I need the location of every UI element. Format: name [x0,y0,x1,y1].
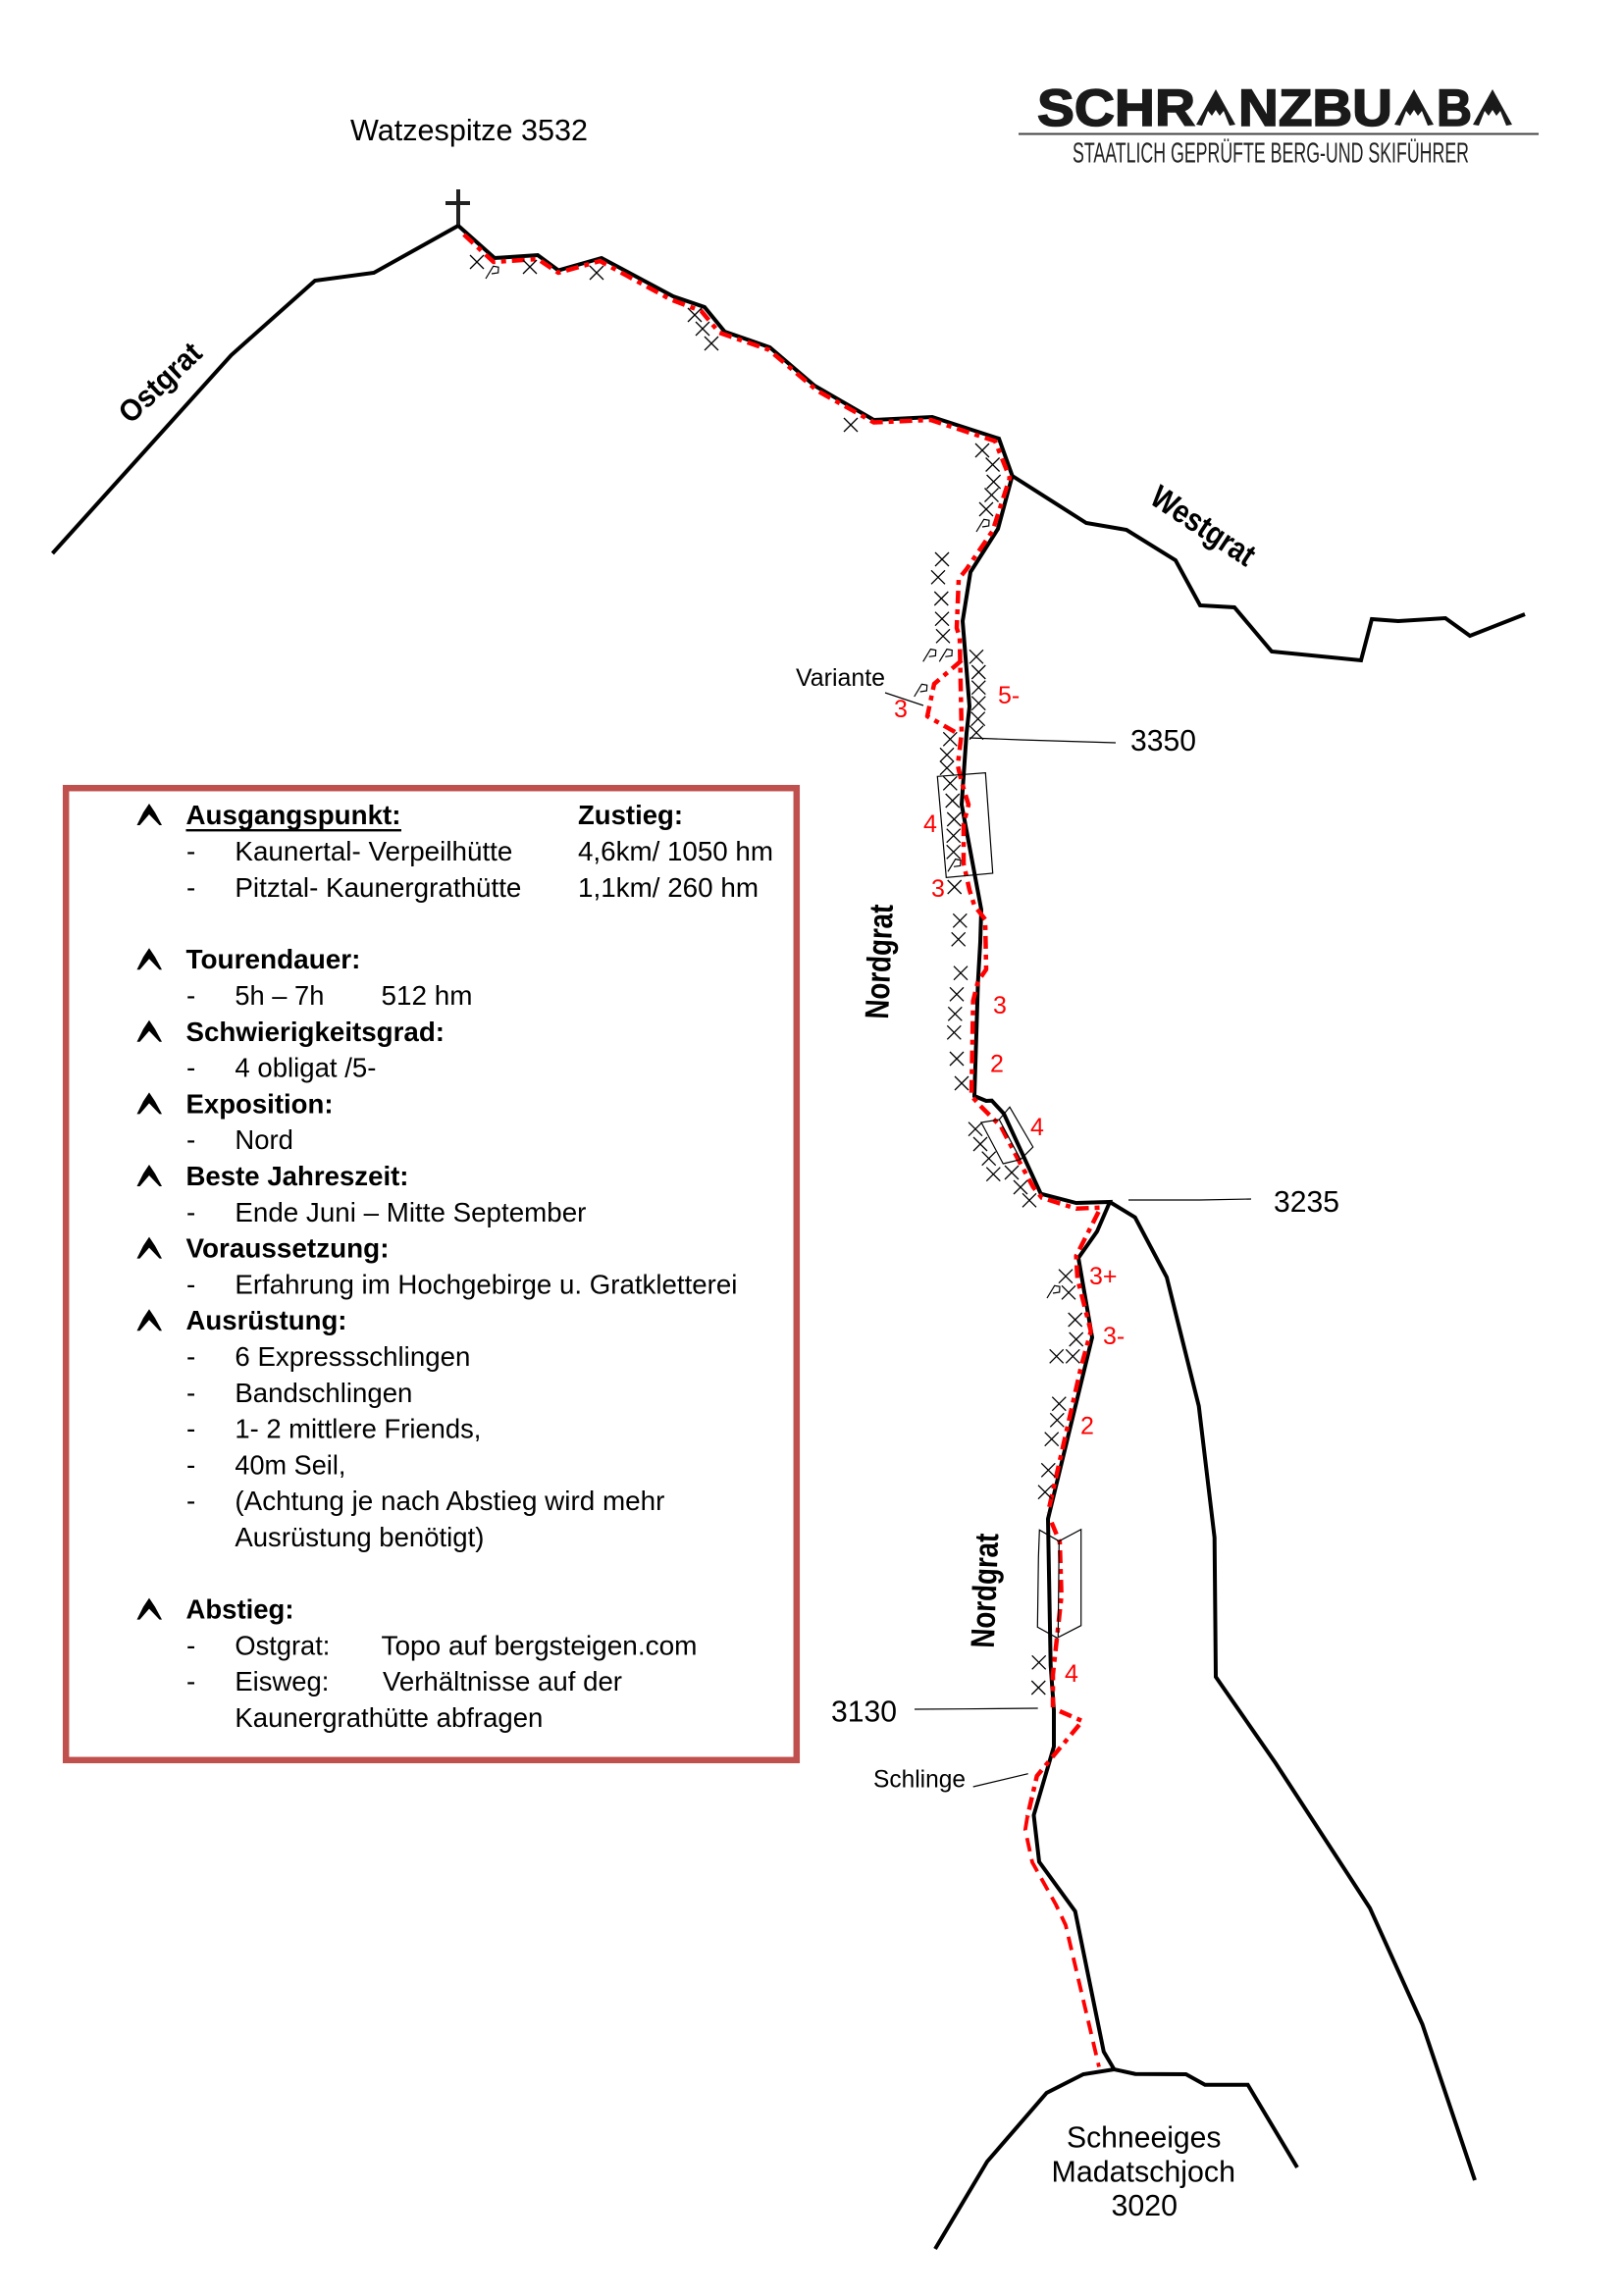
grades: red climbing difficulty numbers: 4 [1065,1660,1078,1688]
feature: lower dihedral [1037,1530,1081,1638]
section: Voraussetzung: Erfahrung im Hochgebirge u. Gratkletterei [235,1269,737,1299]
section: Ausgangspunkt and Zustieg: 4,6km/ 1050 hm [578,836,773,866]
section: Abstieg: Abstieg: [186,1594,294,1625]
label: upper Nordgrat: Nordgrat [859,904,901,1019]
section: Beste Jahreszeit: - [186,1197,195,1227]
section: Ausrüstung: Ausrüstung: [186,1305,347,1335]
section: Ausrüstung: - [186,1341,195,1372]
logo: Schranzbuaba [1019,79,1539,169]
section: Abstieg [137,1594,697,1733]
section: Schwierigkeitsgrad: 4 obligat /5- [235,1053,376,1083]
section: Abstieg: Ostgrat: [235,1630,330,1660]
marks: pitons [486,266,1060,1298]
route: red dashed climbing line [464,235,1101,1513]
grades: red climbing difficulty numbers: 4 [923,810,937,838]
label: Variante: Variante [796,664,885,692]
heading: Watzespitze summit label: Watzespitze 3532 [350,114,588,147]
section: Ausrüstung: 6 Expressschlingen [235,1341,470,1372]
leader: 3130 [915,1708,1038,1709]
ridge: east side ridge from 3235 [1110,1202,1475,2180]
leader: Variante [885,693,923,705]
section: Beste Jahreszeit: Beste Jahreszeit: [186,1161,408,1191]
section: Tourendauer: 5h – 7h [235,980,324,1011]
label: altitude 3350: 3350 [1130,724,1196,757]
section: Abstieg: Topo auf bergsteigen.com [381,1630,697,1660]
section: Abstieg: Kaunergrathütte abfragen [235,1702,543,1733]
icon: summit cross [445,189,470,226]
route: final dashed descent to the saddle [1025,1817,1099,2066]
label: Schneeiges Madatschjoch 3020: Madatschjoch [1052,2155,1235,2188]
section: Tourendauer: 512 hm [381,980,473,1011]
label: Schneeiges Madatschjoch 3020 [1052,2121,1235,2222]
section: Ausrüstung: - [186,1486,195,1516]
logo: Schranzbuaba: SCHR [1037,79,1195,137]
feature: dihedral at grade 4 [981,1107,1033,1164]
section: Ausrüstung: Ausrüstung benötigt) [235,1522,484,1552]
grades: red climbing difficulty numbers: 2 [1080,1413,1094,1440]
section: Ausrüstung [137,1305,664,1552]
section: Schwierigkeitsgrad: - [186,1053,195,1083]
label: Schlinge: Schlinge [873,1766,966,1794]
section: Tourendauer: - [186,980,195,1011]
leader: Schlinge [973,1774,1028,1787]
section: Abstieg: Verhältnisse auf der [383,1666,622,1696]
grades: red climbing difficulty numbers: 3+ [1089,1263,1118,1290]
section: Exposition: Nord [235,1124,293,1155]
section: Ausgangspunkt and Zustieg: Ausgangspunkt: [186,800,400,830]
ridge: Westgrat line [1013,476,1525,660]
label: Schneeiges Madatschjoch 3020: 3020 [1111,2189,1178,2222]
grades: red climbing difficulty numbers: 3- [1103,1323,1125,1350]
label: altitude 3235: 3235 [1274,1185,1339,1219]
section: Ausrüstung: 1- 2 mittlere Friends, [235,1414,481,1444]
ridge: Madatschjoch saddle [935,2069,1297,2249]
feature: slab rectangle [937,773,993,877]
grades: red climbing difficulty numbers: 3 [931,875,945,903]
section: Ausrüstung: - [186,1414,195,1444]
section: Tourendauer: Tourendauer: [186,944,361,974]
leader: 3235 [1128,1199,1251,1200]
section: Ausrüstung: - [186,1449,195,1480]
ridge: main north ridge line [458,226,1114,2069]
label: Westgrat: Westgrat [1144,478,1263,573]
logo: Schranzbuaba: B [1437,79,1472,137]
grades: red climbing difficulty numbers: 3 [894,696,908,723]
section: Abstieg: - [186,1666,195,1696]
route: Variante [927,660,962,733]
section: Abstieg: Eisweg: [235,1666,329,1696]
section: Ausrüstung: Bandschlingen [235,1378,412,1408]
label: Ostgrat: Ostgrat [112,336,209,430]
section: Tourendauer [137,944,473,1011]
section: Ausgangspunkt and Zustieg: - [186,836,195,866]
section: Ausgangspunkt and Zustieg: Kaunertal- Verpeilhütte [235,836,512,866]
section: Ausrüstung: 40m Seil, [235,1449,345,1480]
section: Voraussetzung [137,1233,737,1299]
grades: red climbing difficulty numbers: 2 [990,1050,1004,1077]
leader: 3350 [969,738,1116,743]
section: Ausrüstung: - [186,1378,195,1408]
section: Exposition: - [186,1124,195,1155]
marks: crux crosses [470,255,1083,1695]
grades: red climbing difficulty numbers: 3 [993,992,1007,1019]
section: Voraussetzung: Voraussetzung: [186,1233,389,1264]
section: Ausgangspunkt and Zustieg: Zustieg: [578,800,683,830]
ridge: Ostgrat line [53,226,458,553]
grades: red climbing difficulty numbers: 5- [998,682,1020,709]
section: Voraussetzung: - [186,1269,195,1299]
section: Ausgangspunkt and Zustieg: 1,1km/ 260 hm [578,872,759,903]
section: Ausgangspunkt and Zustieg: Pitztal- Kaunergrathütte [235,872,521,903]
section: Beste Jahreszeit [137,1161,586,1227]
label: altitude 3130: 3130 [831,1696,897,1729]
section: Schwierigkeitsgrad [137,1017,445,1083]
section: Ausgangspunkt and Zustieg: - [186,872,195,903]
route: Schlinge detour [1027,1711,1082,1817]
section: Exposition [137,1088,334,1155]
label: Schneeiges Madatschjoch 3020: Schneeiges [1067,2121,1221,2155]
section: Ausrüstung: (Achtung je nach Abstieg wird mehr [235,1486,664,1516]
logo: Schranzbuaba: NZBU [1238,79,1392,137]
section: Ausgangspunkt and Zustieg [137,800,773,903]
panel: tour information [66,788,797,1760]
grades: red climbing difficulty numbers: 4 [1030,1114,1044,1141]
grades: red climbing difficulty numbers [894,682,1125,1688]
section: Schwierigkeitsgrad: Schwierigkeitsgrad: [186,1017,445,1047]
section: Beste Jahreszeit: Ende Juni – Mitte September [235,1197,586,1227]
label: lower Nordgrat: Nordgrat [965,1533,1006,1648]
section: Exposition: Exposition: [186,1088,334,1119]
route: red dashed lower section [1052,1523,1062,1707]
section: Abstieg: - [186,1630,195,1660]
